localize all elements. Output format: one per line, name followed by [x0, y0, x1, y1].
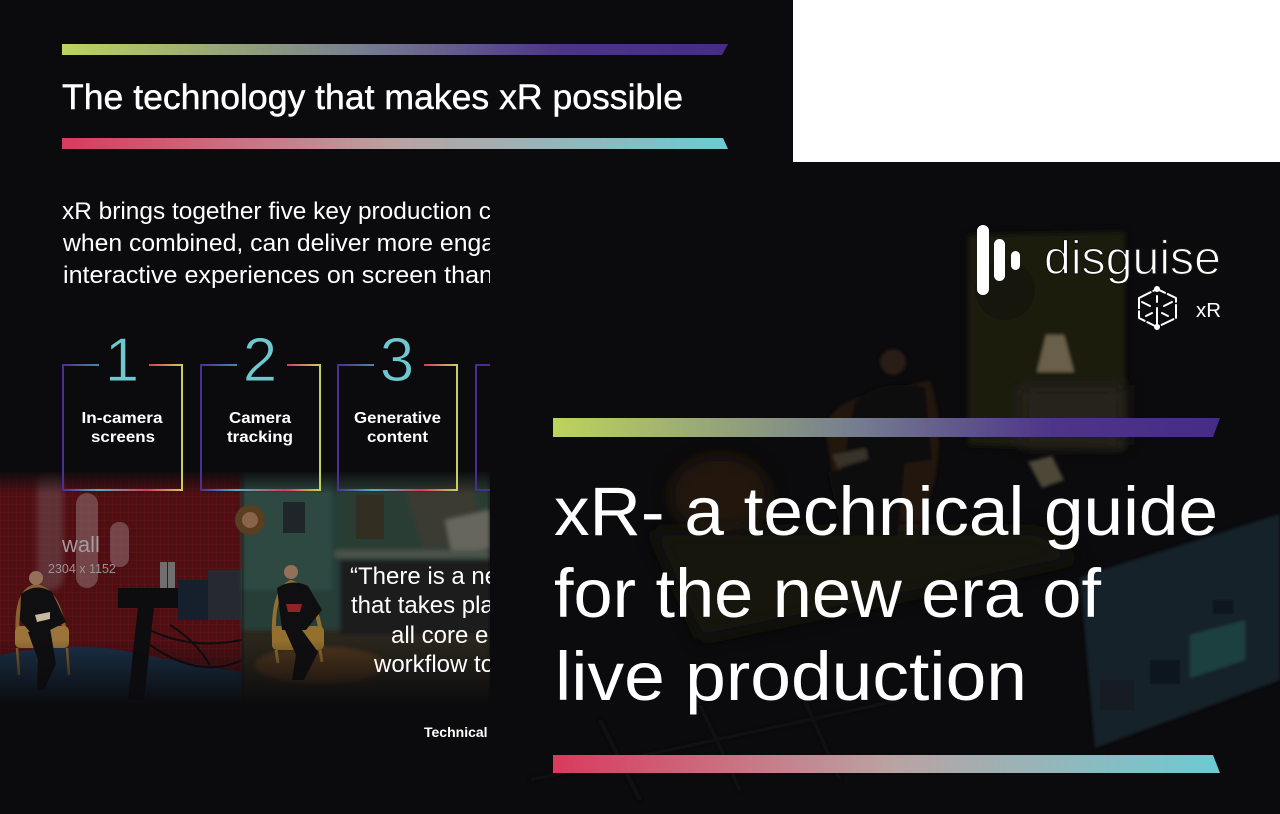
cover top gradient bar: [553, 418, 1220, 437]
photo fade top: [0, 472, 490, 492]
pull quote: that takes place: [351, 592, 519, 619]
camera rig: [118, 562, 242, 700]
step 1 card: [62, 326, 183, 491]
step 3 card: Generative: [354, 410, 441, 427]
cover title: for the new era of: [554, 555, 1102, 632]
seated figure: [272, 565, 324, 680]
page heading: The technology that makes xR possible: [62, 78, 683, 117]
photo: red LED studio: [0, 470, 242, 710]
step 2 card: [200, 326, 321, 491]
fireplace glow: [670, 455, 770, 535]
pull quote: workflow to: [373, 651, 494, 678]
floor: [650, 530, 1080, 640]
left page content: [0, 198, 519, 740]
panel: cover: [553, 225, 1280, 773]
photo fade bottom: [0, 640, 490, 705]
intro paragraph: interactive experiences on screen than: [63, 262, 493, 289]
top gradient bar: [62, 44, 728, 55]
step 3 card: 3: [380, 326, 414, 395]
disguise logo: [977, 225, 1221, 295]
photo: composite room: [235, 474, 490, 688]
panel: technology page: [0, 44, 728, 740]
cover title: xR- a technical guide: [554, 473, 1218, 550]
step 2 card: Camera: [229, 410, 291, 427]
white corner block: [793, 0, 1280, 162]
step 4 card (clipped): [476, 365, 490, 490]
photo strip: studio and composite: [0, 470, 490, 710]
pull quote: all core ele: [391, 622, 507, 649]
monitor: [1080, 514, 1280, 748]
cover title: [554, 473, 1218, 715]
seated figure: [15, 571, 69, 690]
step 1 card: 1: [105, 326, 139, 395]
LED wall: [968, 232, 1125, 450]
cover lower gradient bar: [553, 755, 1220, 773]
lamp: [1037, 335, 1074, 372]
disguise logo: disguise: [1044, 231, 1221, 284]
photo: red LED studio: wall: [61, 532, 100, 557]
xR label: xR: [1196, 300, 1221, 322]
side table lamp: [1028, 456, 1064, 488]
icon: xR cube: [1139, 287, 1176, 329]
intro paragraph: when combined, can deliver more enga: [62, 230, 496, 257]
cover title: live production: [555, 638, 1027, 715]
pull quote: “There is a new: [350, 563, 516, 590]
cover photo: [662, 232, 1280, 748]
step 3 card: [337, 326, 458, 491]
seated man: [826, 348, 940, 532]
lower gradient bar: [62, 138, 728, 149]
step 1 card: In-camera: [82, 410, 163, 427]
step 2 card: 2: [243, 326, 277, 395]
photo: red LED studio: 2304 x 1152: [48, 562, 116, 576]
footer label: Technical: [424, 724, 488, 740]
pull quote: [350, 566, 490, 672]
grid rail: [530, 690, 900, 800]
intro paragraph: xR brings together five key production c: [62, 198, 491, 225]
intro paragraph: [62, 198, 496, 289]
step 3 card: content: [367, 429, 429, 446]
step 1 card: screens: [91, 429, 155, 446]
cover background: [490, 162, 1280, 814]
step 2 card: tracking: [227, 429, 293, 446]
